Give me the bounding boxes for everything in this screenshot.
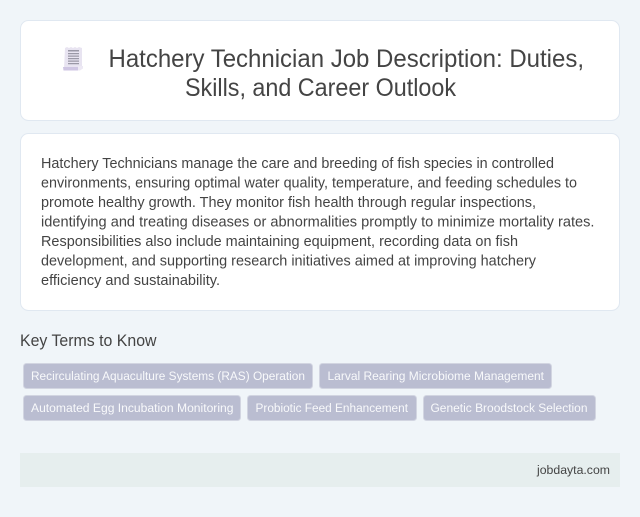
- text block: description: [41, 156, 594, 289]
- tag: probiotic feed: Probiotic Feed Enhancement: [256, 401, 409, 415]
- icon: document scroll: [63, 47, 83, 70]
- tag: broodstock selection: Genetic Broodstock Selection: [430, 401, 588, 415]
- text block: description: development, and supporting research initiatives aimed at improving hatchery: [41, 254, 537, 270]
- text block: description: Responsibilities also include maintaining equipment, recording data on fish: [41, 234, 518, 250]
- text block: description: Hatchery Technicians manage the care and breeding of fish species in controlled: [41, 156, 554, 172]
- tag: broodstock selection: [424, 396, 596, 420]
- footer: jobdayta.com: [536, 463, 610, 477]
- tag: RAS operation: [24, 364, 312, 388]
- tag: probiotic feed: [248, 396, 416, 420]
- footer: [20, 453, 620, 487]
- heading: key terms: Key Terms to Know: [20, 332, 157, 350]
- panel: title card: [20, 20, 620, 120]
- title: Hatchery Technician Job Description: Duties,: [108, 45, 584, 73]
- text block: description: promote healthy growth. They monitor fish health through regular inspections,: [41, 195, 536, 211]
- text block: description: efficiency and sustainability.: [41, 273, 220, 289]
- tag list: key terms: [24, 364, 596, 420]
- panel: description: [20, 134, 620, 310]
- tag: RAS operation: Recirculating Aquaculture Systems (RAS) Operation: [31, 369, 305, 383]
- title: Skills, and Career Outlook: [185, 74, 456, 102]
- tag: egg incubation: [24, 396, 240, 420]
- tag: egg incubation: Automated Egg Incubation Monitoring: [31, 401, 234, 415]
- title: [108, 45, 584, 102]
- tag: larval rearing: Larval Rearing Microbiome Management: [328, 369, 545, 383]
- text block: description: identifying and treating diseases or abnormalities promptly to minimize mortality rates.: [41, 214, 594, 230]
- tag: larval rearing: [320, 364, 552, 388]
- text block: description: environments, ensuring optimal water quality, temperature, and feeding schedules to: [41, 176, 577, 192]
